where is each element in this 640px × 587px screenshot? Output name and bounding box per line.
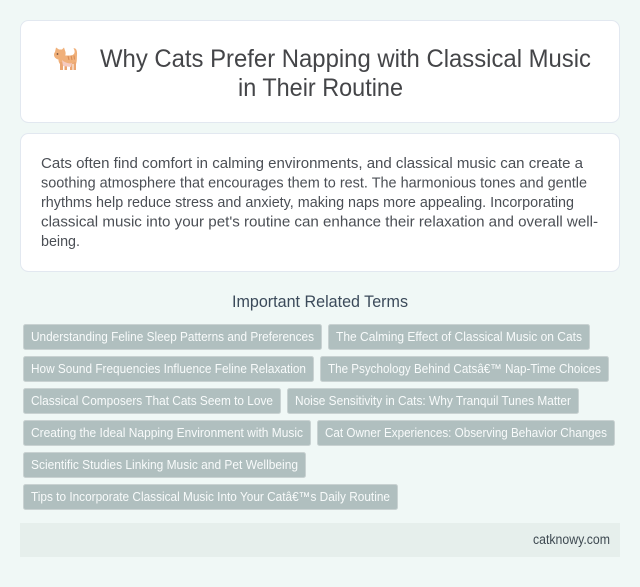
tag: napping environment [24, 420, 310, 446]
text block: description: rhythms help reduce stress and anxiety, making naps more appealing. Incorporating [41, 195, 574, 211]
text block: description [41, 156, 598, 250]
tag: composers: Classical Composers That Cats Seem to Love [31, 394, 273, 408]
tag: owner experiences [318, 420, 614, 446]
panel: description card [20, 134, 620, 272]
text block: description: Cats often find comfort in calming environments, and classical music can create a [41, 156, 584, 172]
tag: feline sleep patterns [24, 324, 322, 350]
tag: sound frequencies [24, 356, 314, 382]
tag: calming effect: The Calming Effect of Classical Music on Cats [336, 330, 582, 344]
tag: napping environment: Creating the Ideal Napping Environment with Music [31, 426, 303, 440]
tag: owner experiences: Cat Owner Experiences: Observing Behavior Changes [325, 426, 607, 440]
tag: noise sensitivity [288, 388, 578, 414]
panel: title card [20, 20, 620, 122]
title: in Their Routine [238, 75, 403, 102]
text block: description: classical music into your pet's routine can enhance their relaxation and overall well- [41, 214, 598, 230]
tag: calming effect [328, 324, 590, 350]
tag: scientific studies: Scientific Studies Linking Music and Pet Wellbeing [31, 458, 298, 472]
footer: catknowy.com [533, 532, 610, 547]
footer [20, 523, 620, 557]
text block: description: soothing atmosphere that encourages them to rest. The harmonious tones and gentle [41, 176, 587, 192]
tag list [24, 324, 614, 510]
icon: cat [54, 48, 77, 70]
text block: description: being. [41, 234, 80, 250]
tag: psychology [320, 356, 608, 382]
heading: important related terms: Important Related Terms [232, 293, 408, 311]
tag: daily routine tips [24, 484, 398, 510]
tag: noise sensitivity: Noise Sensitivity in Cats: Why Tranquil Tunes Matter [295, 394, 571, 408]
tag: feline sleep patterns: Understanding Feline Sleep Patterns and Preferences [31, 330, 314, 344]
tag: daily routine tips: Tips to Incorporate Classical Music Into Your Catâ€™s Daily Routine [31, 490, 390, 504]
tag: sound frequencies: How Sound Frequencies Influence Feline Relaxation [31, 362, 306, 376]
tag: scientific studies [24, 452, 306, 478]
title: Why Cats Prefer Napping with Classical Music [100, 46, 591, 73]
tag: composers [24, 388, 280, 414]
tag: psychology: The Psychology Behind Catsâ€™ Nap-Time Choices [328, 362, 601, 376]
title [100, 46, 591, 102]
